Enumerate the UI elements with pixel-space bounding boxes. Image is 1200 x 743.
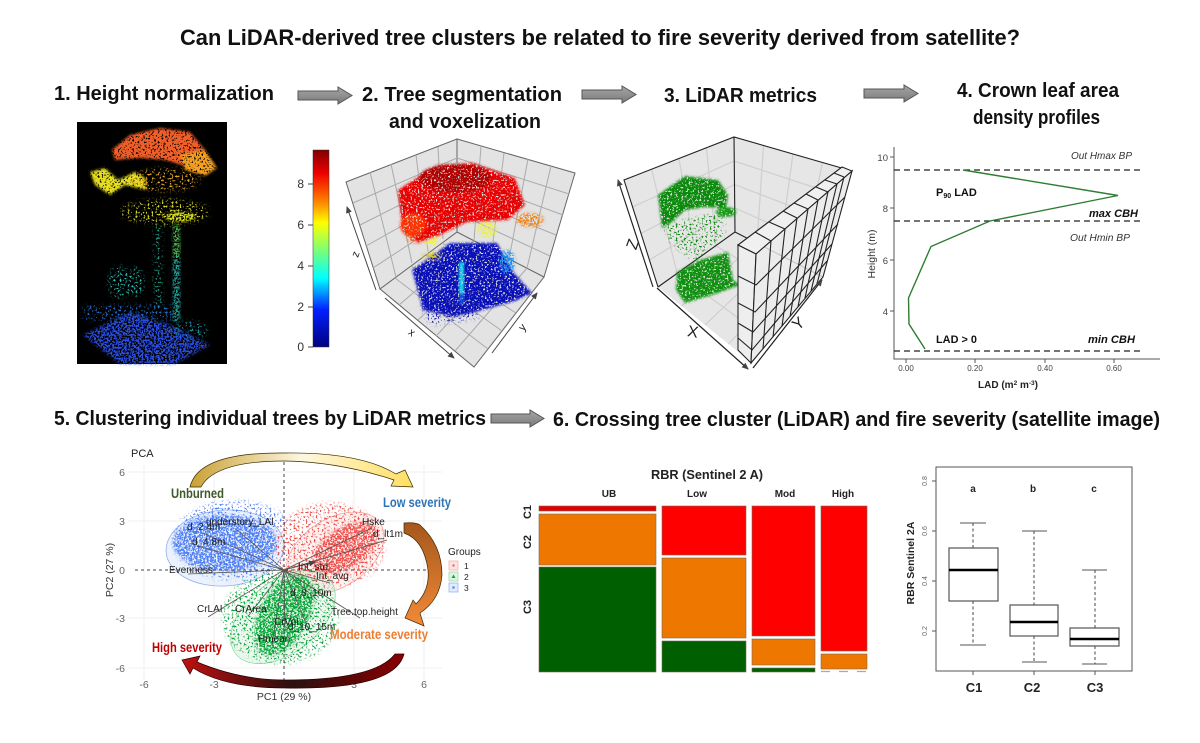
- panel: 3D voxelized tree: x: [406, 326, 418, 340]
- panel: LiDAR metrics voxel cube: X: [686, 323, 700, 342]
- green understory points: [676, 252, 740, 303]
- trunk points: [173, 225, 180, 322]
- vector labels: Int_std: [298, 562, 328, 573]
- chart: crown leaf area density profile: 90: [943, 193, 951, 200]
- chart: crown leaf area density profile: P: [936, 187, 943, 199]
- chart: mosaic plot of clusters by RBR class: C3: [522, 600, 534, 614]
- arrow: step 1 to 2: [298, 87, 352, 104]
- panel: tree height-normalized point cloud: [77, 122, 227, 364]
- chart: boxplot of RBR by cluster: 0.8: [922, 476, 929, 486]
- crown points: [90, 128, 217, 195]
- chart: crown leaf area density profile: 2: [1014, 380, 1018, 387]
- chart: mosaic plot of clusters by RBR class: C2: [522, 535, 534, 549]
- cyan trunk points: [459, 262, 464, 304]
- panel: 3D voxelized tree: y: [516, 321, 529, 334]
- severity labels: High severity: [152, 640, 222, 655]
- chart: mosaic plot of clusters by RBR class: C1: [522, 505, 534, 519]
- chart: crown leaf area density profile: 6: [883, 256, 888, 267]
- orange points: [406, 213, 544, 243]
- chart: boxplot of RBR by cluster: C2: [1024, 680, 1040, 695]
- panel: LiDAR metrics voxel cube: Z: [624, 237, 643, 252]
- vector labels: Tree.top.height: [331, 607, 398, 618]
- heading: step 4: [957, 80, 1120, 129]
- axes: [618, 180, 653, 287]
- panel: colour scale: [297, 150, 329, 354]
- chart: crown leaf area density profile: LAD > 0: [936, 334, 977, 346]
- heading: step 5: 5. Clustering individual trees by LiDAR metrics: [54, 408, 486, 430]
- vector labels: d_lt1m: [373, 529, 403, 540]
- group ellipses: [163, 506, 287, 590]
- dashed thresholds: [894, 170, 1140, 351]
- heading: step 1: 1. Height normalization: [54, 83, 274, 105]
- chart: mosaic plot of clusters by RBR class: [522, 467, 867, 672]
- chart: mosaic plot of clusters by RBR class: High: [832, 489, 854, 500]
- heading: step 2: [362, 84, 562, 133]
- chart: crown leaf area density profile: [866, 147, 1160, 391]
- chart: boxplot of RBR by cluster: a: [970, 484, 976, 495]
- chart: boxplot of RBR by cluster: 0.4: [922, 576, 929, 586]
- panel: colour scale: 0: [297, 340, 304, 354]
- vector labels: [169, 517, 403, 645]
- chart: crown leaf area density profile: 0.20: [967, 364, 983, 373]
- heading: step 2: 2. Tree segmentation: [362, 84, 562, 106]
- legend: 1: [464, 561, 469, 571]
- title: Can LiDAR-derived tree clusters be related to fire severity derived from satellite?: [180, 25, 1020, 50]
- vector labels: Hske: [362, 517, 385, 528]
- vector labels: CrArea: [235, 604, 267, 615]
- axis ticks: [139, 679, 427, 691]
- arrow: step 5 to 6: [491, 410, 544, 427]
- chart: PCA biplot: -6: [116, 663, 125, 675]
- chart: crown leaf area density profile: min CBH: [1088, 334, 1136, 346]
- loading vectors: [188, 528, 387, 645]
- chart: crown leaf area density profile: ): [1035, 380, 1038, 391]
- red crown points: [398, 163, 525, 242]
- severity labels: Low severity: [383, 495, 451, 510]
- legend: Groups: [448, 547, 481, 558]
- chart: boxplot of RBR by cluster: 0.2: [922, 626, 929, 636]
- axis ticks: 0: [281, 679, 287, 691]
- chart: PCA biplot: 3: [119, 516, 125, 528]
- chart: crown leaf area density profile: 0.40: [1037, 364, 1053, 373]
- chart: PCA biplot: -3: [116, 613, 125, 625]
- legend: 2: [464, 572, 469, 582]
- panel: LiDAR metrics voxel cube: Y: [789, 314, 809, 334]
- chart: crown leaf area density profile: 10: [877, 153, 888, 164]
- chart: boxplot of RBR by cluster: C1: [966, 680, 982, 695]
- blue understory points: [412, 243, 532, 317]
- chart: mosaic plot of clusters by RBR class: UB: [602, 489, 616, 500]
- light blue points: [499, 250, 515, 274]
- panel: LiDAR metrics voxel cube: [618, 137, 852, 369]
- chart: PCA biplot: 0: [119, 565, 125, 577]
- chart: mosaic plot of clusters by RBR class: Mod: [775, 489, 795, 500]
- box C1: [949, 523, 998, 645]
- axis ticks: 3: [351, 679, 357, 691]
- chart: mosaic plot of clusters by RBR class: RBR (Sentinel 2 A): [651, 467, 763, 482]
- chart: boxplot of RBR by cluster: b: [1030, 484, 1036, 495]
- severity labels: [152, 486, 451, 655]
- chart: boxplot of RBR by cluster: c: [1091, 484, 1097, 495]
- vector labels: d_4.8m: [192, 537, 225, 548]
- chart: PCA biplot: PC1 (29 %): [257, 691, 311, 703]
- severity labels: Moderate severity: [330, 627, 428, 642]
- panel: colour scale: 6: [297, 218, 304, 232]
- point clouds: [173, 512, 386, 665]
- vector labels: Hmean: [258, 634, 290, 645]
- chart: crown leaf area density profile: Height (m): [866, 229, 878, 279]
- green sparse stem points: [662, 212, 725, 262]
- vector labels: CrVol: [274, 617, 298, 628]
- chart: boxplot of RBR by cluster: C3: [1087, 680, 1103, 695]
- chart: boxplot of RBR by cluster: 0.6: [922, 526, 929, 536]
- heading: step 4: 4. Crown leaf area: [957, 80, 1120, 102]
- axis ticks: 6: [421, 679, 427, 691]
- chart: boxplot of RBR by cluster: [905, 467, 1132, 695]
- axes: [347, 207, 376, 290]
- arrow: low to moderate severity: [404, 523, 442, 626]
- voxel wall: [738, 167, 852, 363]
- severity labels: Unburned: [171, 486, 224, 501]
- chart: crown leaf area density profile: 4: [883, 307, 888, 318]
- chart: crown leaf area density profile: 0.60: [1106, 364, 1122, 373]
- yellow mid points: [422, 221, 497, 260]
- chart: crown leaf area density profile: -3: [1029, 380, 1035, 387]
- chart: PCA biplot: [104, 448, 481, 703]
- vector labels: d_2.4m: [187, 522, 220, 533]
- chart: crown leaf area density profile: LAD: [951, 187, 977, 199]
- panel: 3D voxelized tree: [346, 139, 575, 367]
- heading: step 6: 6. Crossing tree cluster (LiDAR) and fire severity (satellite image): [553, 409, 1160, 431]
- ground points: [83, 312, 210, 364]
- zero lines: [135, 462, 440, 682]
- chart: crown leaf area density profile: 0.00: [898, 364, 914, 373]
- chart: PCA biplot: PC2 (27 %): [104, 543, 116, 597]
- vector labels: d_10_15m: [288, 622, 335, 633]
- chart: crown leaf area density profile: max CBH: [1089, 208, 1139, 220]
- mid canopy points: [120, 168, 210, 225]
- heading: step 4: density profiles: [973, 107, 1100, 129]
- chart: crown leaf area density profile: m: [1017, 380, 1029, 391]
- arrow: step 3 to 4: [864, 85, 918, 102]
- heading: step 3: 3. LiDAR metrics: [664, 85, 817, 107]
- panel: 3D voxelized tree: z: [349, 250, 363, 259]
- box C3: [1070, 570, 1119, 664]
- vector labels: CrLAI: [197, 604, 223, 615]
- heading: step 2: and voxelization: [389, 111, 541, 133]
- arrow: unburned to low severity: [190, 453, 413, 487]
- LAD curve: [908, 170, 1118, 349]
- panel: colour scale: 8: [297, 177, 304, 191]
- cube walls and floor: [624, 137, 852, 363]
- green crown points: [658, 176, 736, 228]
- chart: boxplot of RBR by cluster: RBR Sentinel 2A: [905, 521, 917, 604]
- chart: crown leaf area density profile: 8: [883, 204, 888, 215]
- chart: crown leaf area density profile: Out Hmin BP: [1070, 233, 1130, 244]
- legend: [448, 547, 481, 593]
- vector labels: understory_LAI: [206, 517, 274, 528]
- chart: crown leaf area density profile: LAD (m: [978, 380, 1014, 391]
- chart: PCA biplot: 6: [119, 467, 125, 479]
- arrow: step 2 to 3: [582, 86, 636, 103]
- axis ticks: -3: [209, 679, 219, 691]
- box walls and floor: [346, 139, 575, 367]
- vector labels: Evenness: [169, 565, 213, 576]
- vector labels: Int_avg: [316, 571, 349, 582]
- chart: mosaic plot of clusters by RBR class: Low: [687, 489, 707, 500]
- chart: crown leaf area density profile: Out Hmax BP: [1071, 151, 1132, 162]
- legend: 3: [464, 583, 469, 593]
- chart: PCA biplot: PCA: [131, 448, 154, 460]
- panel: colour scale: 2: [297, 300, 304, 314]
- vector labels: d_8_10m: [290, 588, 332, 599]
- box C2: [1010, 531, 1058, 662]
- arrow: moderate to high severity: [182, 654, 404, 688]
- panel: colour scale: 4: [297, 259, 304, 273]
- axis ticks: -6: [139, 679, 149, 691]
